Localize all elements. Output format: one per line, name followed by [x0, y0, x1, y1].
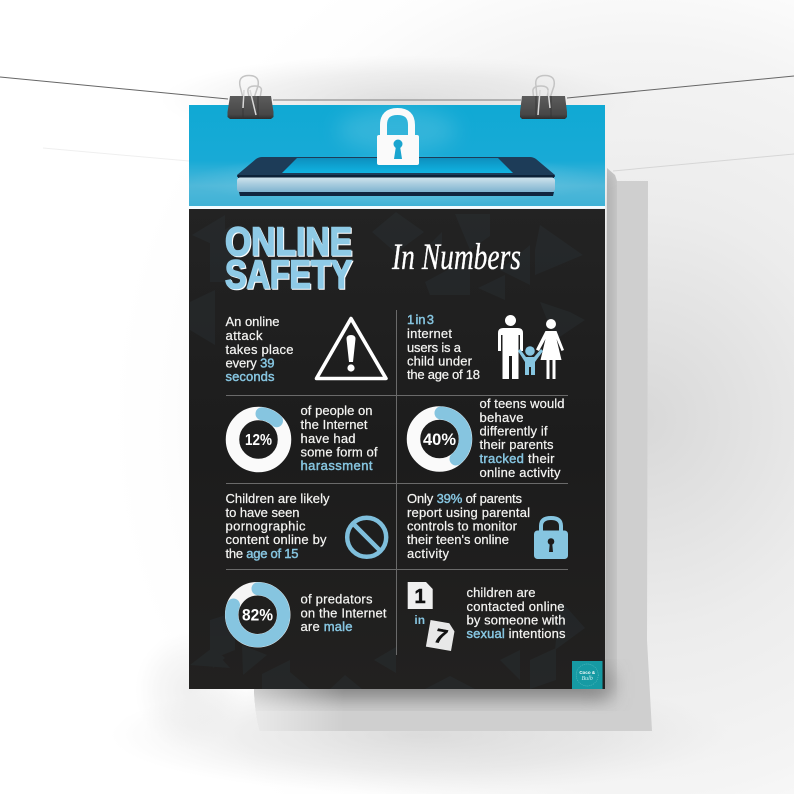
text: parental controls: controls to monitor: [407, 518, 518, 534]
title: Online Safety: ONLINE: [225, 220, 352, 264]
text: online attack: takes place: [226, 342, 294, 357]
icon: prohibition sign: [347, 518, 386, 557]
text: sexual intentions: sexual intentions: [466, 626, 566, 641]
text: teens: their parents: [480, 437, 554, 452]
text: sexual intentions: by someone with: [466, 612, 566, 628]
text: harassment: some form of: [300, 444, 378, 460]
text: 1 in 3: child under: [407, 354, 473, 368]
text: pornographic content: the age of 15: [226, 546, 298, 561]
hanging wire: [0, 76, 794, 100]
icon: large padlock: [377, 112, 419, 165]
text: teens: online activity: [480, 465, 561, 480]
smartphone: [237, 157, 555, 196]
text: harassment: [300, 403, 378, 473]
text: harassment: harassment: [300, 458, 373, 473]
poster header: blue panel: [187, 105, 607, 208]
icon: 1 in 7 paper cards: in: [414, 613, 425, 627]
text: teens: behave: [480, 410, 524, 425]
icon: 1 in 7 paper cards: 1: [414, 586, 426, 608]
text: 1 in 3: internet: [407, 326, 452, 341]
text: parental controls: Only 39% of parents: [407, 491, 522, 506]
icon: 1 in 7 paper cards: 7: [433, 625, 449, 649]
text: teens: [480, 396, 564, 480]
text: pornographic content: to have seen: [226, 505, 300, 520]
text: online attack: [226, 314, 294, 384]
text: harassment: have had: [300, 431, 356, 446]
chart: 40% donut: [414, 413, 466, 465]
text: predators: of predators: [300, 592, 373, 607]
logo badge: Bulb: [582, 676, 593, 682]
text: pornographic content: pornographic: [226, 518, 306, 534]
binder clip right: [520, 76, 567, 119]
title: Online Safety: SAFETY: [225, 253, 352, 297]
chart: 82% donut: 82%: [242, 606, 273, 624]
text: online attack: seconds: [226, 369, 275, 384]
text: 1 in 3: [407, 312, 480, 382]
text: 1 in 3: 1 in 3: [407, 312, 434, 327]
text: teens: of teens would: [480, 396, 564, 411]
subtitle: In Numbers: In Numbers: [391, 237, 521, 278]
title: Online Safety: SAFETY: [226, 254, 353, 298]
grid dividers: [226, 310, 568, 655]
logo badge: [572, 661, 602, 689]
text: parental controls: their teen's online: [407, 532, 509, 547]
icon: small padlock: [534, 518, 568, 559]
poster shadow on wall: [43, 148, 794, 732]
title: Online Safety: ONLINE: [226, 221, 353, 265]
text: online attack: every 39: [226, 356, 274, 370]
text: sexual intentions: [466, 585, 566, 641]
text: harassment: of people on: [300, 403, 372, 418]
text: 1 in 3: users is a: [407, 340, 462, 355]
text: online attack: attack: [226, 328, 263, 343]
text: parental controls: [407, 491, 530, 561]
text: predators: on the Internet: [300, 606, 387, 620]
text: teens: tracked their: [480, 451, 555, 466]
title: Online Safety: [225, 220, 353, 298]
dark poster body: [189, 209, 605, 689]
text: predators: [300, 592, 387, 634]
text: sexual intentions: contacted online: [466, 599, 564, 614]
icon: 1 in 7 paper cards: [408, 582, 456, 651]
text: sexual intentions: children are: [466, 585, 536, 600]
icon: warning triangle: [316, 318, 386, 378]
text: 1 in 3: the age of 18: [407, 367, 480, 382]
logo badge: Coco &: [579, 670, 596, 675]
text: predators: are male: [300, 619, 352, 634]
text: pornographic content: content online by: [226, 532, 327, 547]
chart: 12% donut: [232, 414, 284, 466]
text: pornographic content: Children are likely: [226, 491, 330, 506]
chart: 12% donut: 12%: [245, 432, 272, 449]
text: pornographic content: [226, 491, 330, 561]
text: parental controls: report using parental: [407, 505, 530, 520]
text: online attack: An online: [226, 314, 280, 329]
text: harassment: the Internet: [300, 417, 368, 432]
chart: 82% donut: [232, 589, 284, 641]
text: parental controls: activity: [407, 546, 450, 561]
text: teens: differently if: [480, 424, 548, 438]
icon: family: [498, 315, 564, 379]
chart: 40% donut: 40%: [423, 431, 456, 449]
binder clip left: [228, 76, 274, 119]
